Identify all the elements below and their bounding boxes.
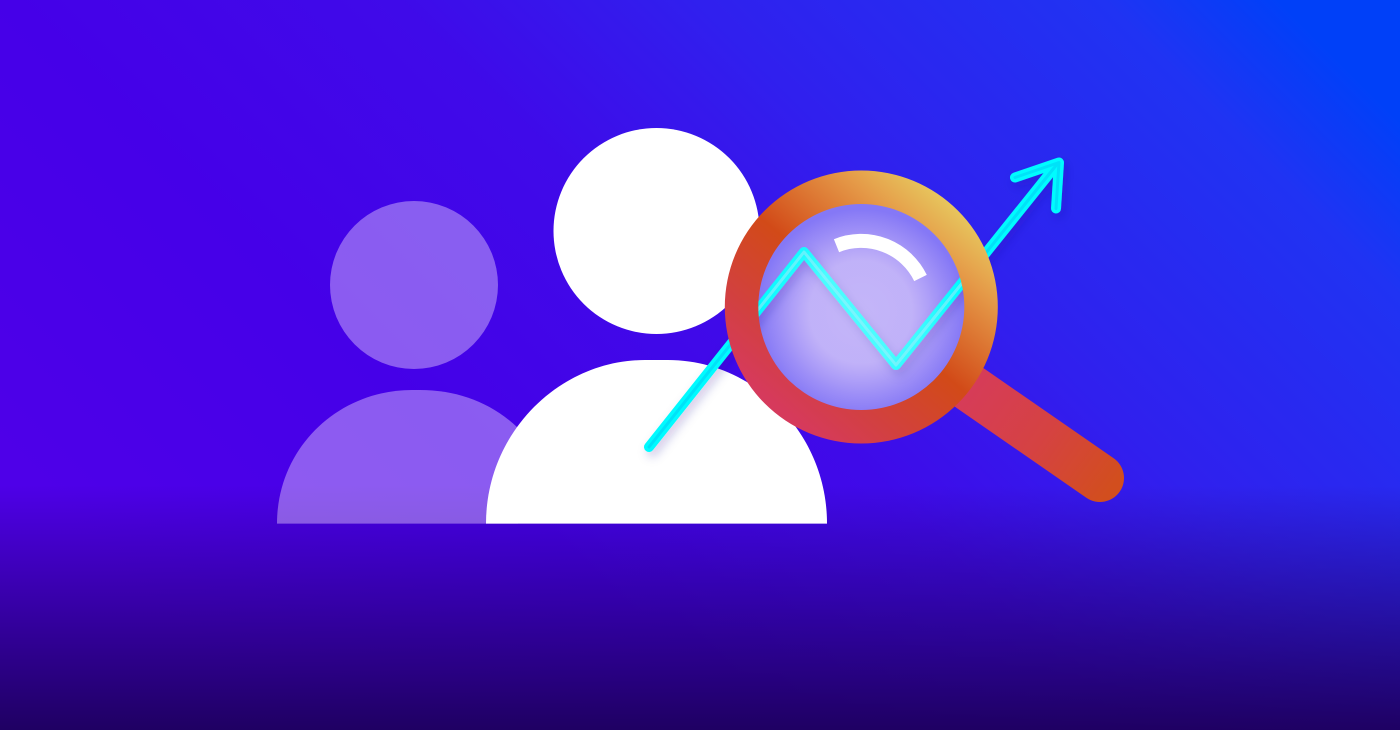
lens glare <box>836 241 920 278</box>
magnifier ring <box>725 170 998 444</box>
icon: front user <box>486 128 827 524</box>
magnifier handle <box>970 388 1100 478</box>
bottom dark fade <box>0 485 1400 730</box>
icon: back user <box>277 201 518 524</box>
lens glow <box>757 203 965 411</box>
magnifier lens <box>757 203 965 411</box>
trend arrow <box>649 162 1059 447</box>
icon: magnifying glass with trend arrow <box>649 162 1100 478</box>
highlight on trend line inside lens <box>745 252 975 365</box>
